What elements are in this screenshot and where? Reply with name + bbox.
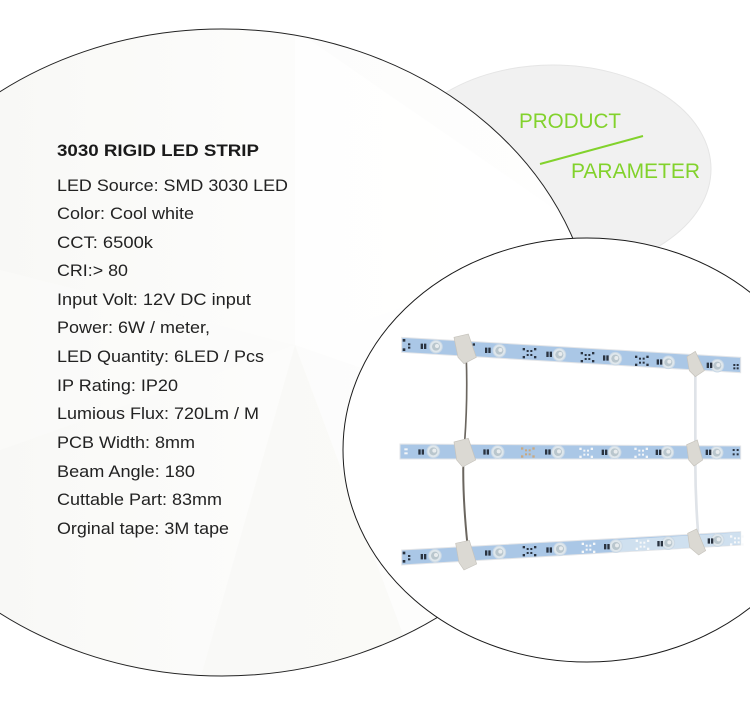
spec lines: Color: Cool white [57,205,194,223]
spec lines: CRI:> 80 [57,262,128,280]
spec lines: Orginal tape: 3M tape [57,520,229,538]
spec lines: LED Quantity: 6LED / Pcs [57,348,264,366]
divider line: green slash [540,136,643,164]
spec lines: Lumious Flux: 720Lm / M [57,405,259,423]
panel: large specification ellipse [0,29,600,680]
spec lines: Beam Angle: 180 [57,463,195,481]
spec title: 3030 RIGID LED STRIP [57,141,259,160]
spec lines [57,177,288,538]
spec lines: LED Source: SMD 3030 LED [57,177,288,195]
strip 3 [402,532,744,565]
spec lines: IP Rating: IP20 [57,377,178,395]
spec lines: CCT: 6500k [57,234,154,252]
panel: grey product parameter ellipse [395,65,711,273]
spec lines: Power: 6W / meter, [57,319,210,337]
spec lines: Cuttable Part: 83mm [57,491,222,509]
heading: PRODUCT: PRODUCT [519,110,621,133]
strip 2 [400,444,741,459]
spec lines: Input Volt: 12V DC input [57,291,251,309]
strip 1 [402,337,741,373]
text block: specification list [57,141,288,538]
spec lines: PCB Width: 8mm [57,434,195,452]
photo: LED strips with connectors [400,334,744,570]
heading: PARAMETER: PARAMETER [571,160,700,183]
connectors [454,334,706,570]
wires [463,360,698,543]
panel: product photo circle [343,238,750,662]
